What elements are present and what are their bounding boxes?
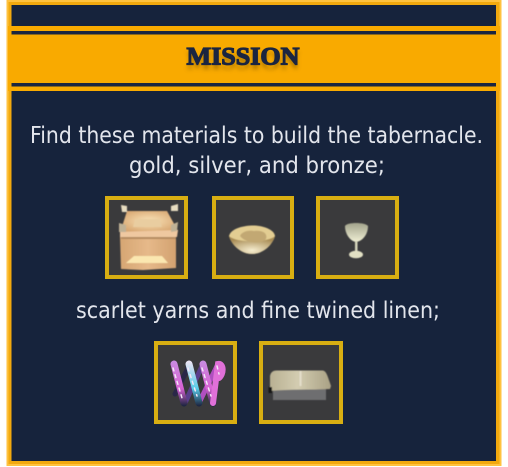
tile: gold bowl [214,198,292,277]
panel: top strip [12,5,496,26]
panel: mission content [12,91,496,461]
tile: silver goblet [318,198,397,277]
tile: gold ark [107,198,186,277]
heading shadow: MISSION [186,48,300,75]
tile: fine linen [261,343,341,422]
heading: MISSION [186,44,300,70]
text: scarlet yarns and fine twined linen: scarlet yarns and fine twined linen; [76,298,440,324]
panel: mission banner [8,26,500,91]
tile: scarlet yarn [156,343,235,422]
text: gold, silver, and bronze: gold, silver, and bronze; [129,153,385,179]
